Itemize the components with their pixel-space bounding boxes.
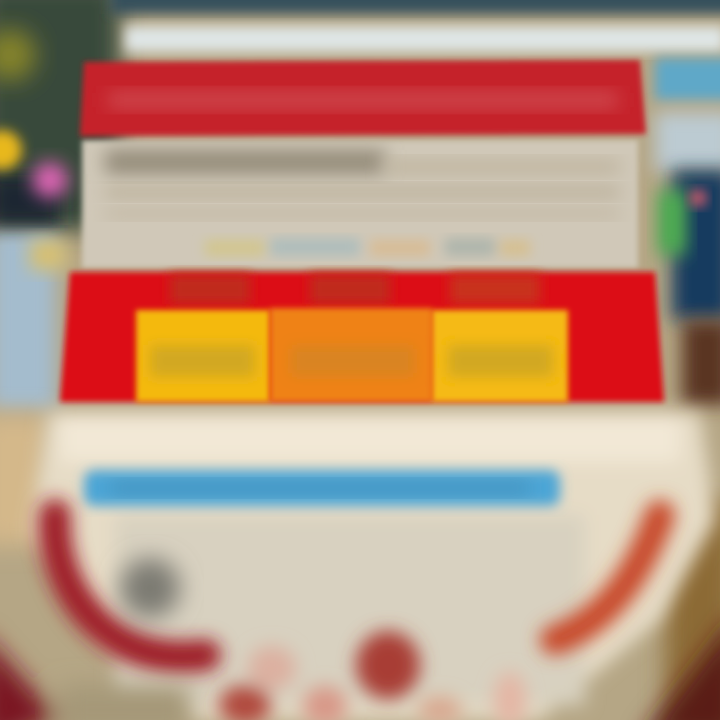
upper beige text panel — [82, 140, 638, 268]
bottom corners — [0, 610, 720, 720]
blue bar — [84, 470, 560, 506]
hands at bottom — [219, 631, 526, 720]
column: yellow left — [136, 310, 270, 402]
row of small coloured swatches — [205, 238, 530, 256]
red band — [60, 272, 664, 402]
lower paper panel — [30, 412, 716, 720]
grey circle icon — [120, 558, 180, 618]
column: orange centre — [270, 308, 432, 402]
red header banner — [80, 60, 646, 136]
column: yellow right — [432, 310, 568, 402]
red arc left — [55, 515, 205, 657]
header text band — [108, 92, 618, 108]
red arc right — [555, 515, 660, 640]
